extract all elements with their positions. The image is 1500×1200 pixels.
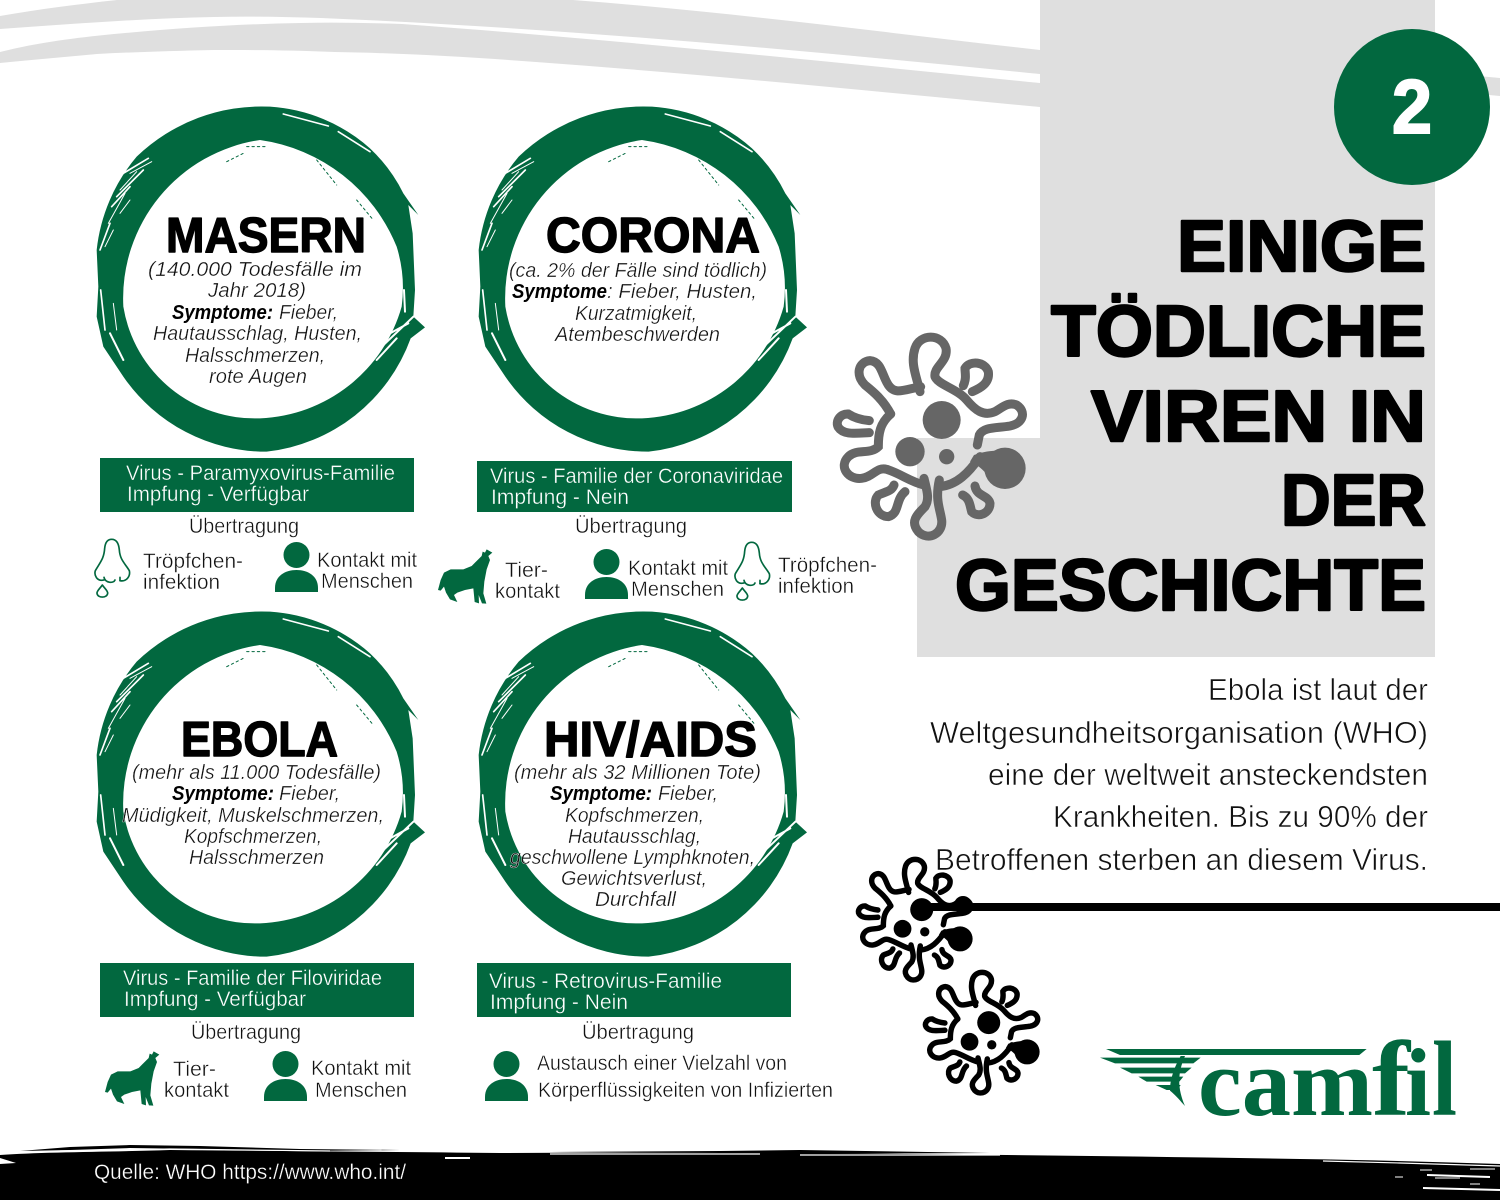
title: DER (1281, 461, 1426, 541)
icon: wolf (105, 1051, 159, 1106)
label: Übertragung: Übertragung (189, 515, 299, 538)
info bar: Ebola: Impfung - Verfügbar (124, 988, 306, 1011)
text block: Corona symptoms: : Fieber, Husten, (607, 281, 757, 303)
label: Tierkontakt: kontakt (495, 580, 560, 603)
text block: Corona symptoms: Symptome (512, 281, 607, 303)
brush ring: HIV/AIDS (479, 611, 807, 957)
heading: Ebola: EBOLA (181, 713, 338, 767)
label: Kontakt mit Menschen (317, 549, 417, 593)
brush ring: Corona (479, 106, 807, 452)
info bar: HIV/AIDS: Impfung - Nein (490, 991, 628, 1014)
brush ring: Ebola (97, 611, 425, 957)
text block: Masern symptoms: (140.000 Todesfälle im (148, 259, 362, 281)
logo: Camfil: cam (1198, 1029, 1373, 1136)
text block: HIV/AIDS symptoms (510, 762, 761, 911)
text block: Ebola symptoms: Symptome: (172, 783, 274, 805)
text block: Ebola symptoms: Müdigkeit, Muskelschmerzen, (122, 805, 384, 827)
icon: small black virus with line (858, 859, 1500, 980)
text block: Corona symptoms: Atembeschwerden (554, 324, 720, 346)
info bar: HIV/AIDS: Virus - Retrovirus-Familie (489, 970, 722, 993)
icon: nose (735, 542, 770, 600)
text block: Ebola intro: Weltgesundheitsorganisation (WHO) (930, 715, 1428, 750)
logo: Camfil: i (1405, 1029, 1431, 1136)
icon: person (585, 549, 628, 599)
icon: person (485, 1051, 528, 1101)
label: Tröpfcheninfektion: Tröpfchen- (778, 554, 877, 577)
info bar: Ebola: Virus - Familie der Filoviridae (123, 967, 382, 990)
text block: Ebola intro (930, 672, 1428, 877)
icon: nose (95, 539, 130, 597)
heading: HIV/AIDS: HIV/AIDS (544, 713, 757, 767)
text block: Ebola intro: Krankheiten. Bis zu 90% der (1053, 799, 1428, 834)
text block: Ebola intro: Ebola ist laut der (1208, 672, 1428, 707)
text block: HIV/AIDS symptoms: (mehr als 32 Millionen Tote) (514, 762, 761, 784)
text block: HIV/AIDS symptoms: Hautausschlag, (568, 826, 701, 848)
icon: small black virus (925, 972, 1040, 1093)
label: Kontakt mit Menschen (311, 1057, 411, 1102)
label: Übertragung: Übertragung (582, 1021, 694, 1044)
text block: HIV/AIDS symptoms: Fieber, (658, 783, 718, 805)
text block: HIV/AIDS symptoms: Gewichtsverlust, (561, 868, 707, 890)
text block: Ebola symptoms: Halsschmerzen (189, 847, 324, 869)
label: Übertragung: Übertragung (191, 1021, 301, 1044)
text block: HIV/AIDS symptoms: Symptome: (550, 783, 652, 805)
label: Austausch von Körperflüssigkeiten: Austausch einer Vielzahl von (537, 1052, 787, 1075)
text block: Masern symptoms (148, 259, 362, 388)
heading: Masern: MASERN (166, 209, 366, 263)
panel: HIV/AIDS (477, 611, 833, 1102)
source note: Quelle: WHO https://www.who.int/ (94, 1161, 406, 1184)
label: Tröpfcheninfektion (143, 550, 243, 594)
text block: Ebola symptoms: Kopfschmerzen, (184, 826, 322, 848)
label: Tröpfcheninfektion: infektion (778, 575, 854, 598)
text block: Masern symptoms: Symptome: (172, 302, 273, 324)
info bar: Masern: Impfung - Verfügbar (127, 483, 309, 506)
panel: Ebola (97, 611, 425, 1106)
label: Tierkontakt: Tier- (505, 559, 548, 582)
label: Tröpfcheninfektion (778, 554, 877, 598)
info bar: Corona (477, 461, 792, 512)
text block: Masern symptoms: rote Augen (209, 366, 307, 388)
logo: Camfil: f (1372, 1020, 1411, 1138)
info bar: Corona: Virus - Familie der Coronaviridae (490, 465, 783, 488)
label: Kontakt mit Menschen: Menschen (631, 578, 724, 601)
text block: Masern symptoms: Fieber, (279, 302, 338, 324)
text block: HIV/AIDS symptoms: geschwollene Lymphknoten, (510, 847, 755, 869)
title (955, 207, 1426, 626)
label: Übertragung: Übertragung (575, 515, 687, 538)
label: Tröpfcheninfektion: infektion (143, 571, 220, 594)
label: Kontakt mit Menschen (628, 557, 728, 601)
panel: Masern (95, 106, 425, 597)
label: Kontakt mit Menschen: Menschen (321, 570, 413, 593)
icon: large grey virus (837, 337, 1026, 536)
info bar: Masern: Virus - Paramyxovirus-Familie (126, 462, 395, 485)
title: EINIGE (1177, 207, 1426, 287)
text block: Corona symptoms: Kurzatmigkeit, (575, 303, 697, 325)
label: Tierkontakt (164, 1058, 229, 1102)
label: Kontakt mit Menschen: Kontakt mit (628, 557, 728, 580)
text block: Ebola symptoms: (mehr als 11.000 Todesfälle) (132, 762, 381, 784)
panel: Corona (438, 106, 877, 604)
logo: Camfil (1100, 1020, 1457, 1138)
title: VIREN IN (1091, 377, 1426, 457)
info bar: Corona: Impfung - Nein (491, 486, 629, 509)
grey title panel (917, 0, 1435, 657)
icon: person (264, 1051, 307, 1101)
badge: number 2 (1334, 29, 1490, 185)
brush ring: Masern (97, 106, 425, 452)
text block: Masern symptoms: Hautausschlag, Husten, (153, 323, 362, 345)
logo: Camfil: l (1432, 1020, 1457, 1138)
text block: Ebola intro: eine der weltweit ansteckendsten (988, 757, 1428, 792)
info bar: HIV/AIDS (477, 963, 791, 1017)
text block: HIV/AIDS symptoms: Kopfschmerzen, (565, 805, 704, 827)
text block: Masern symptoms: Jahr 2018) (207, 280, 306, 302)
info bar: Masern (100, 458, 414, 512)
icon: person (275, 542, 318, 592)
background brush stripes (0, 0, 1500, 107)
footer brush band (0, 1145, 1500, 1200)
icon: wolf (438, 549, 492, 604)
label: Tierkontakt: Tier- (173, 1058, 216, 1081)
label: Austausch von Körperflüssigkeiten: Körperflüssigkeiten von Infizierten (538, 1079, 833, 1102)
text block: Ebola symptoms: Fieber, (279, 783, 340, 805)
label: Austausch von Körperflüssigkeiten (537, 1052, 833, 1102)
label: Tierkontakt: kontakt (164, 1079, 229, 1102)
badge: number 2: 2 (1392, 65, 1432, 150)
text block: HIV/AIDS symptoms: Durchfall (595, 889, 677, 911)
info bar: Ebola (100, 963, 414, 1017)
text block: Masern symptoms: Halsschmerzen, (185, 345, 325, 367)
label: Tierkontakt (495, 559, 560, 603)
text block: Ebola symptoms (122, 762, 384, 869)
text block: Ebola intro: Betroffenen sterben an diesem Virus. (935, 842, 1428, 877)
label: Kontakt mit Menschen: Kontakt mit (317, 549, 417, 572)
title: TÖDLICHE (1051, 292, 1426, 372)
label: Kontakt mit Menschen: Kontakt mit (311, 1057, 411, 1080)
title: GESCHICHTE (955, 546, 1426, 626)
text block: Corona symptoms: (ca. 2% der Fälle sind tödlich) (509, 260, 767, 282)
label: Tröpfcheninfektion: Tröpfchen- (143, 550, 243, 573)
text block: Corona symptoms (509, 260, 767, 346)
label: Kontakt mit Menschen: Menschen (315, 1079, 407, 1102)
heading: Corona: CORONA (546, 209, 760, 263)
